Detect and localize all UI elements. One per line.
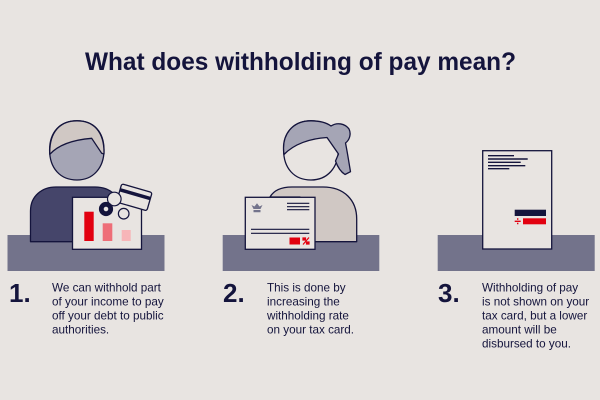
step 3 text: tax card, but a lower — [482, 310, 587, 322]
step 3 text: amount will be — [482, 324, 557, 336]
step 1 text: off your debt to public — [52, 310, 164, 322]
step 2 text: withholding rate — [266, 310, 349, 322]
step 1 text: We can withhold part — [52, 282, 162, 294]
desk 1 — [8, 235, 164, 271]
panel: step 2 illustration — [223, 121, 379, 271]
document with bar chart — [72, 197, 142, 249]
letter with crown and percent — [245, 197, 315, 249]
step 1 text: authorities. — [52, 324, 109, 336]
icon: payment card — [116, 184, 152, 211]
address lines — [251, 203, 309, 233]
desk 3 — [438, 235, 595, 271]
step 2 number: 2. — [223, 278, 245, 308]
step 3 number: 3. — [438, 278, 460, 308]
step 3 text: disbursed to you. — [482, 338, 571, 350]
icon: coins — [101, 192, 129, 219]
panel: step 1 illustration — [8, 121, 164, 271]
tax document — [483, 151, 552, 249]
step 2 text: This is done by — [267, 282, 346, 294]
divide mark — [515, 218, 521, 224]
panel: step 3 illustration — [438, 151, 595, 271]
step 1 text: of your income to pay — [52, 296, 164, 308]
step 2 text: on your tax card. — [267, 324, 354, 336]
icon: crown — [252, 203, 262, 212]
step 3 text: Withholding of pay — [482, 282, 578, 294]
step 2 text: increasing the — [267, 296, 340, 308]
icon: woman — [270, 121, 357, 242]
desk 2 — [223, 235, 379, 271]
step 3 text: is not shown on your — [482, 296, 589, 308]
title: What does withholding of pay mean? — [85, 48, 516, 76]
percent mark — [303, 238, 309, 244]
step 1 number: 1. — [9, 278, 31, 308]
red amount box — [290, 238, 300, 244]
icon: man — [30, 121, 114, 242]
